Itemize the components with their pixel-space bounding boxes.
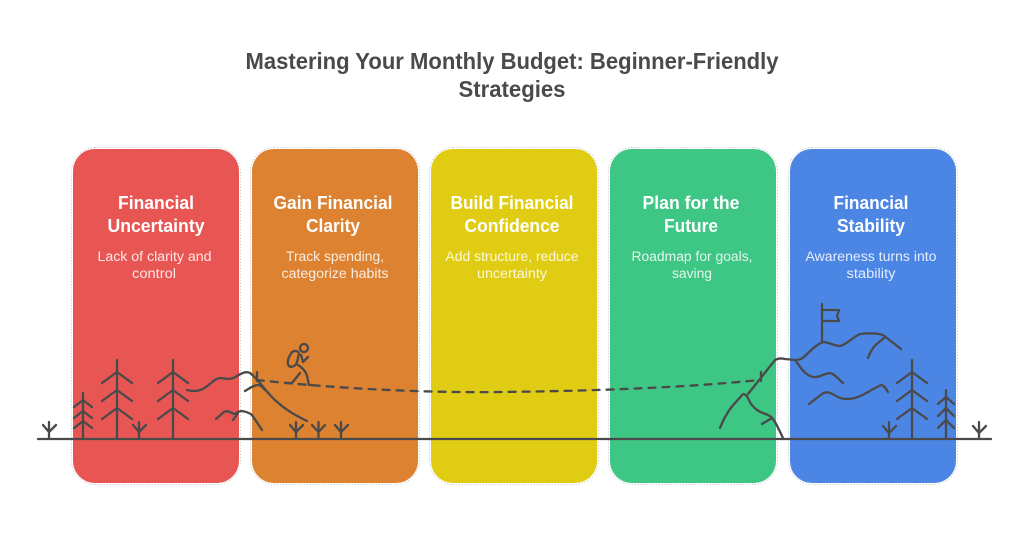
panel: gain financial clarity: Track spending,	[286, 249, 384, 264]
dashed path	[257, 380, 760, 392]
title: Mastering Your Monthly Budget: Beginner-Friendly	[246, 48, 778, 74]
icon: left hills	[187, 372, 307, 430]
panel: build financial confidence: Confidence	[464, 215, 560, 236]
panel: gain financial clarity: categorize habits	[282, 266, 389, 281]
panel: plan for the future: Roadmap for goals,	[632, 249, 752, 264]
panel: gain financial clarity: Clarity	[306, 215, 361, 236]
panel: plan for the future: Plan for the	[642, 192, 740, 213]
title: Strategies	[458, 76, 566, 102]
panel: build financial confidence: Build Financial	[450, 192, 574, 213]
panel: build financial confidence	[430, 148, 598, 484]
icon: hiker	[287, 344, 313, 385]
panel: plan for the future: Future	[664, 215, 718, 236]
icon: right mountains	[720, 333, 901, 438]
ground line	[38, 438, 991, 440]
panel: build financial confidence: Add structure, reduce	[446, 249, 578, 264]
panel: financial uncertainty	[72, 148, 240, 484]
icon: flag	[822, 304, 839, 342]
panel: financial stability: Financial	[834, 192, 908, 213]
panel: build financial confidence: uncertainty	[477, 266, 547, 281]
panel: plan for the future: saving	[672, 266, 712, 281]
panel: financial stability: Awareness turns into	[806, 249, 936, 264]
panel: financial stability: Stability	[837, 215, 906, 236]
icon: left sprouts	[43, 422, 348, 439]
panel: financial stability: stability	[846, 266, 896, 281]
panel: gain financial clarity: Gain Financial	[274, 192, 392, 213]
panel: financial stability	[788, 148, 958, 484]
title	[246, 48, 778, 102]
panel: financial uncertainty: Uncertainty	[108, 215, 205, 236]
icon: right trees	[897, 360, 954, 439]
panel: financial uncertainty: Lack of clarity and	[98, 249, 212, 264]
panel: financial uncertainty: control	[132, 266, 176, 281]
icon: right sprouts	[883, 422, 986, 439]
panel: financial uncertainty: Financial	[118, 192, 194, 213]
panel: plan for the future	[608, 148, 778, 484]
icon: left trees	[74, 360, 188, 439]
panel: gain financial clarity	[250, 148, 420, 484]
